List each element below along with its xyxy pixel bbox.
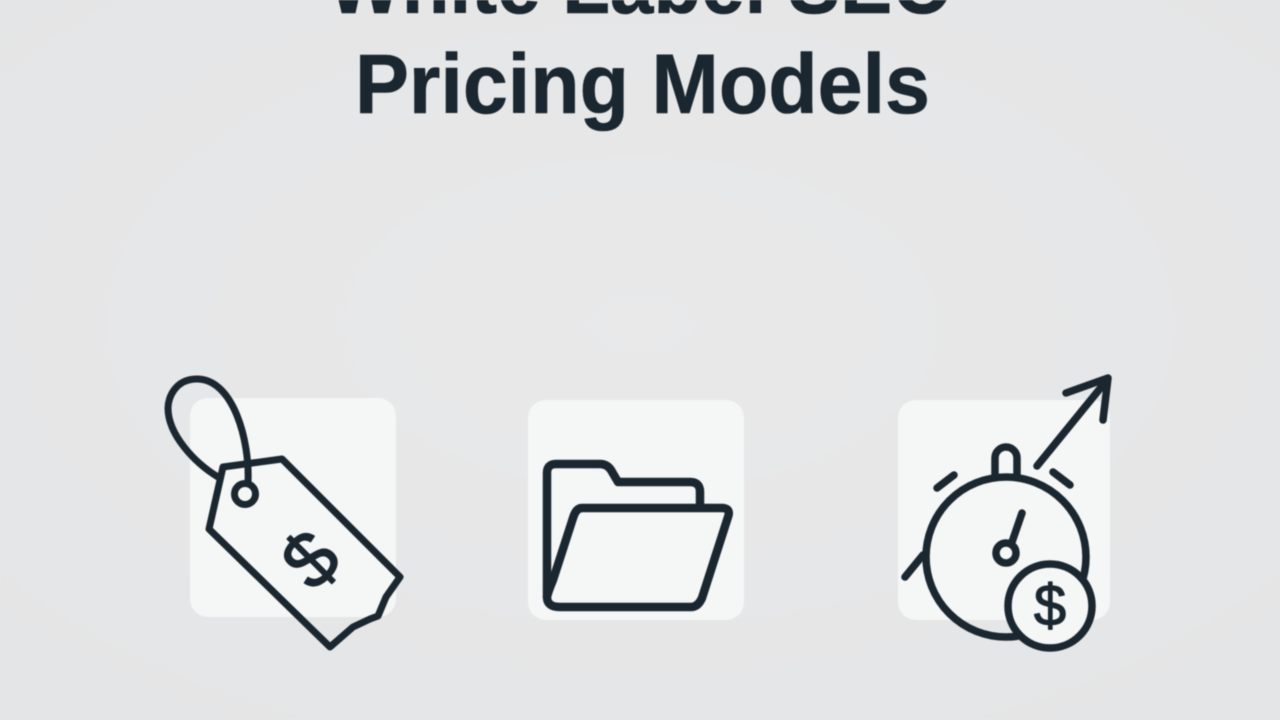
icon: stopwatch with arrow and coin (905, 378, 1108, 648)
icon card: folder (528, 400, 744, 620)
title (328, 0, 953, 131)
panel: price tag (168, 379, 400, 647)
panel: stopwatch (898, 378, 1110, 648)
icon: price tag with dollar: $ (264, 513, 357, 606)
icon card: stopwatch (898, 400, 1110, 620)
icon: price tag with dollar (168, 379, 400, 647)
icon: stopwatch with arrow and coin: $ (1034, 573, 1066, 638)
panel: folder (528, 400, 744, 620)
icon: open folder (547, 464, 729, 607)
icon card: price tag (190, 398, 396, 617)
title: Pricing Models (355, 37, 930, 131)
